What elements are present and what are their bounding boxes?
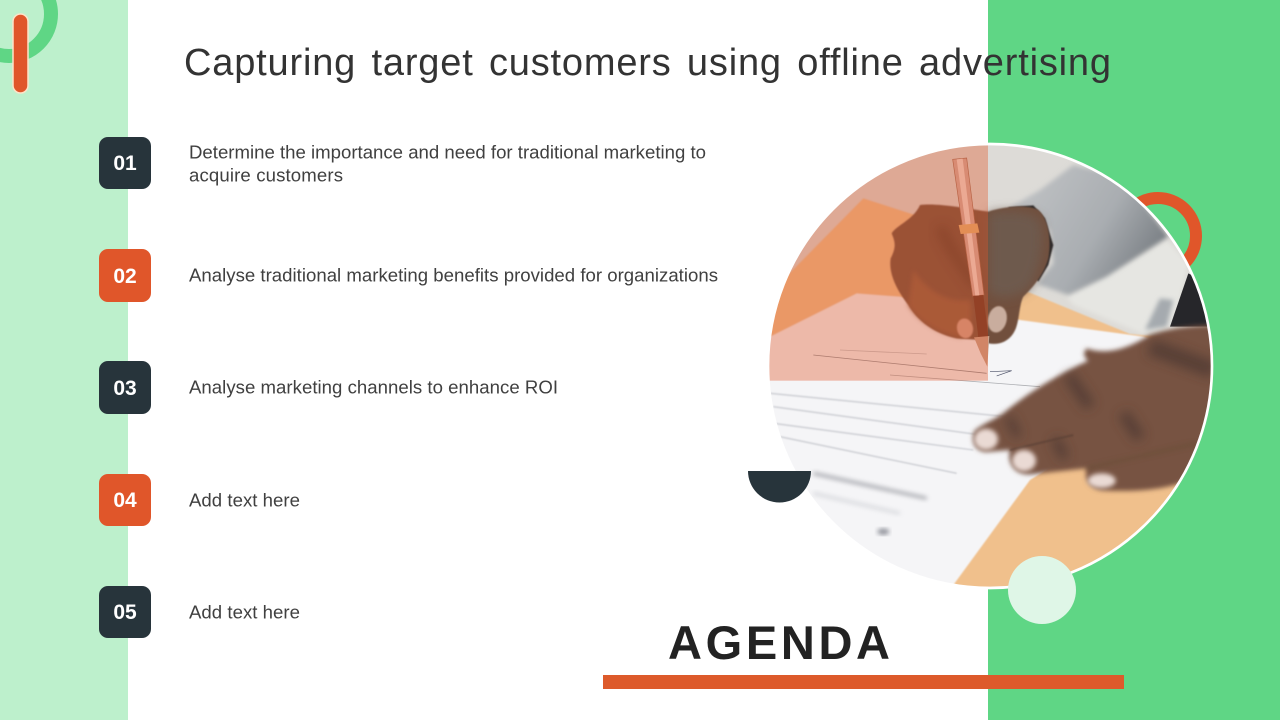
agenda item 05 (99, 586, 300, 638)
white ring around photo (768, 144, 1212, 588)
pale green circle (1008, 556, 1076, 624)
orange tint over top-left quadrant (769, 145, 988, 381)
decorative ring top-left (0, 0, 51, 56)
pale background wall (790, 145, 1207, 336)
agenda item 01: 01 (113, 152, 137, 175)
writing hand (890, 204, 1050, 344)
agenda item 03: Analyse marketing channels to enhance ROI (189, 376, 558, 398)
paper document (769, 292, 1148, 584)
agenda item 04: Add text here (189, 490, 300, 510)
pen (953, 158, 989, 367)
fingernails of writing hand (956, 318, 974, 339)
agenda item 05: Add text here (189, 602, 300, 622)
right green band (988, 0, 1280, 720)
agenda item 01: acquire customers (189, 164, 343, 186)
dark half circle (748, 471, 811, 503)
dark jacket (1170, 273, 1207, 327)
agenda item 03 (99, 361, 558, 414)
left pale green band (0, 0, 128, 720)
decorative orange pill top-left (13, 14, 28, 93)
agenda item 02: 02 (113, 265, 137, 288)
resting hand (973, 325, 1220, 491)
orange underline bar (603, 675, 1124, 689)
decorative orange arc behind photo (1120, 198, 1196, 274)
AGENDA heading: AGENDA (668, 616, 890, 669)
agenda item 04 (99, 474, 300, 526)
agenda item 01 (99, 137, 706, 189)
grey sleeve (1010, 165, 1168, 295)
agenda item 02 (99, 249, 718, 302)
agenda item 04: 04 (113, 489, 137, 512)
white object behind the sleeve (1067, 240, 1188, 334)
fingernails of resting hand (974, 429, 1116, 488)
agenda item 01: Determine the importance and need for traditional marketing to (189, 142, 706, 162)
agenda item 02: Analyse traditional marketing benefits provided for organizations (189, 264, 718, 286)
document text lines (813, 350, 1040, 387)
shading across knuckles and between fingers (1008, 347, 1213, 458)
title: Capturing target customers using offline advertising (184, 42, 1111, 84)
cuff (1008, 205, 1053, 282)
agenda item 03: 03 (113, 377, 137, 400)
wood table (771, 198, 1178, 587)
agenda item 05: 05 (113, 601, 137, 624)
photo circle: hands signing a document (769, 142, 1214, 590)
